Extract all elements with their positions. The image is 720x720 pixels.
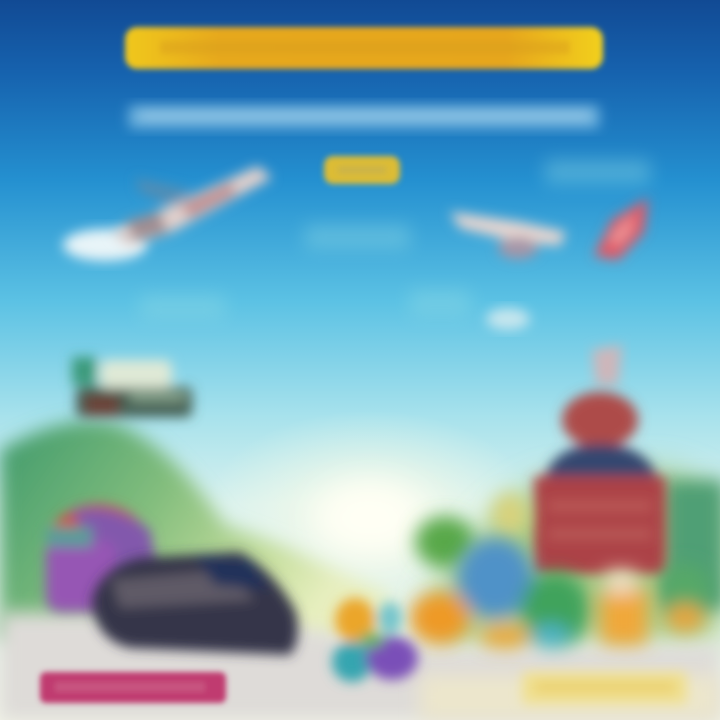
ground: [0, 612, 720, 720]
icon: dark car: [92, 552, 298, 655]
icon: airplane left with cloud: [63, 166, 272, 261]
building: [534, 345, 666, 574]
bright horizon glow: [315, 485, 425, 555]
icon: small distant plane: [486, 308, 530, 330]
subtitle text bar: [128, 105, 600, 129]
icon: train on hill: [72, 357, 192, 417]
pink footer label: [40, 672, 226, 703]
faint caption labels: [140, 160, 650, 319]
dark roof band: [544, 444, 658, 478]
icon: coloured balls centre: [332, 598, 418, 682]
icon: airplane right: [450, 198, 648, 260]
sun glow: [205, 410, 535, 610]
brick facade: [534, 476, 666, 574]
icon: bushes by building: [415, 493, 528, 568]
icon: red tail fin: [594, 198, 648, 260]
icon: coloured balloons group right: [410, 538, 711, 648]
dome: [562, 392, 638, 448]
title banner: [125, 27, 603, 69]
icon: colourful luggage: [46, 504, 158, 612]
right green hill: [430, 470, 720, 640]
small yellow badge: [324, 156, 400, 184]
flag on roof: [592, 345, 622, 385]
yellow footer label: [522, 672, 687, 704]
left green hill: [0, 421, 390, 640]
